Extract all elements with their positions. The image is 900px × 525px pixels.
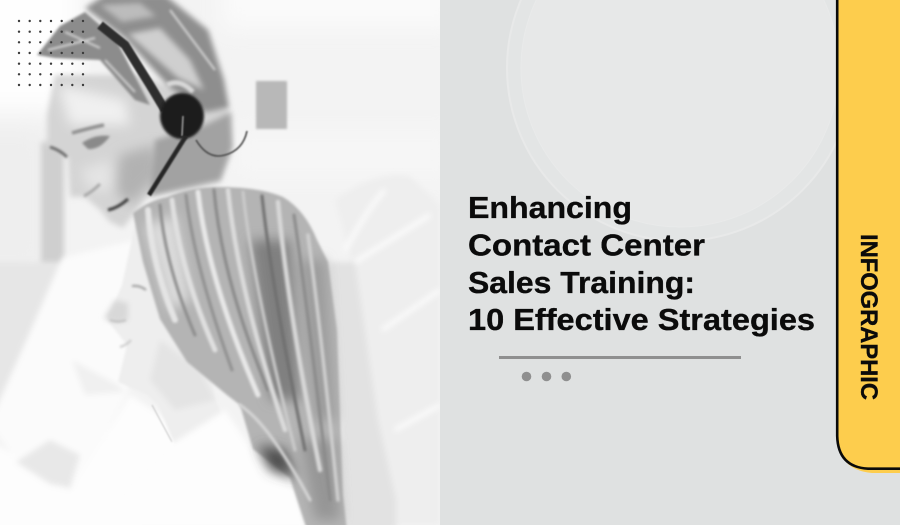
background window: [256, 81, 287, 129]
man's shirt: [0, 256, 398, 525]
title: Contact Center: [468, 228, 705, 262]
facial features: [50, 125, 128, 210]
title: Enhancing: [468, 190, 632, 225]
woman's hair: [133, 187, 347, 525]
dot grid: [18, 20, 84, 86]
photo: contact center agents: [0, 0, 460, 525]
microphone boom: [149, 136, 186, 195]
title: [468, 190, 815, 337]
man's head and headset: [37, 0, 247, 228]
ear: [167, 83, 193, 92]
face: [47, 75, 232, 228]
woman's face and neck: [104, 242, 214, 442]
divider line: [499, 356, 741, 359]
title: Sales Training:: [468, 265, 695, 300]
title: 10 Effective Strategies: [468, 302, 815, 337]
tab label: INFOGRAPHIC: [855, 234, 882, 400]
headset earpiece: [160, 93, 204, 139]
woman's shirt: [142, 414, 303, 525]
headset cable: [196, 131, 247, 156]
decorative circle: [507, 0, 853, 241]
headset headband: [100, 25, 165, 110]
hair: [37, 0, 229, 112]
background pillar: [41, 142, 64, 267]
yellow infographic tab: [837, 0, 900, 473]
three dots: [522, 372, 571, 381]
